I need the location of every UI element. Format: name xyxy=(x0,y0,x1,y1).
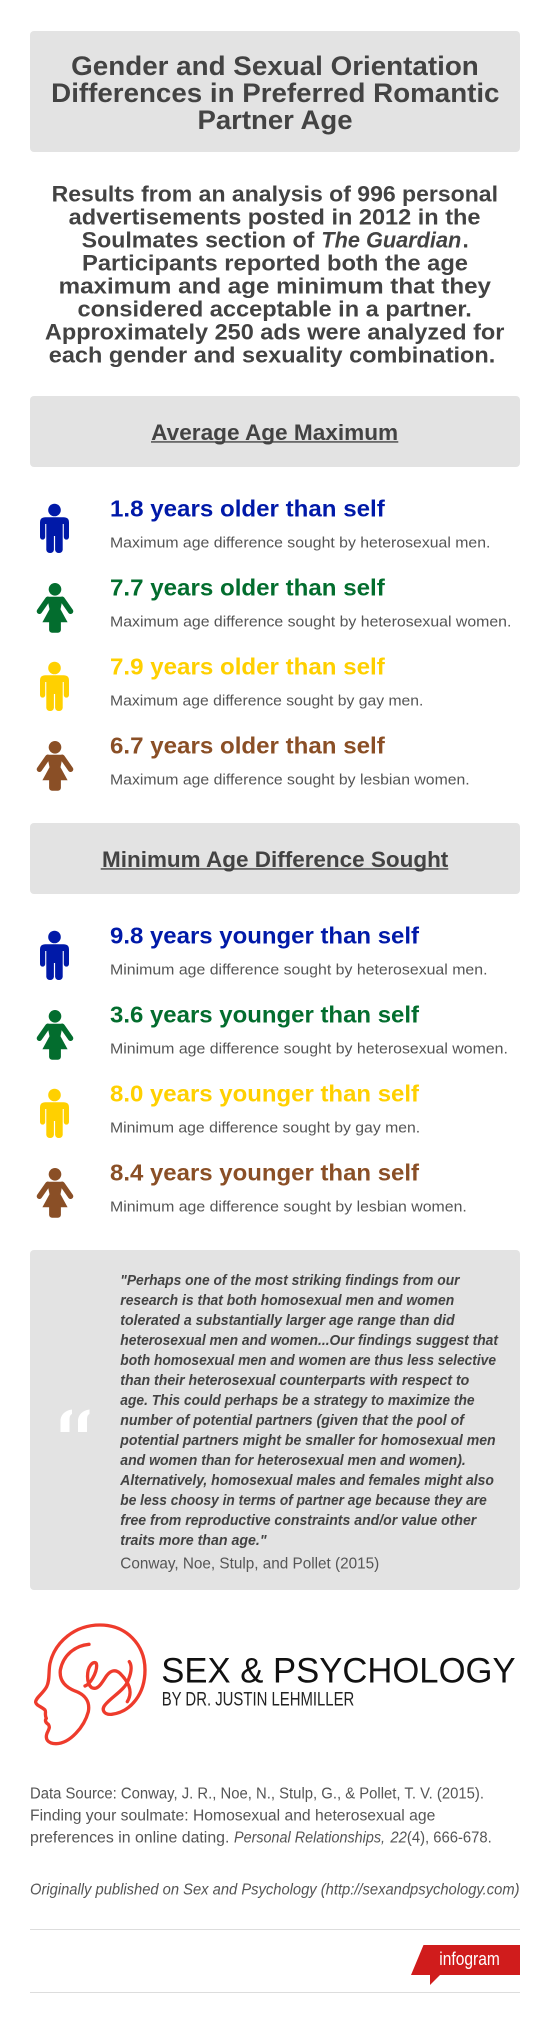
panel: minimum age difference heading: Minimum Age Difference Sought xyxy=(102,847,449,872)
text block: introduction: Approximately 250 ads were analyzed for xyxy=(45,320,505,345)
heading: title xyxy=(51,51,499,135)
text block: quotation: number of potential partners (given that the pool of xyxy=(120,1413,466,1429)
row: heterosexual women maximum xyxy=(39,575,511,633)
text block: introduction: The Guardian xyxy=(321,228,461,253)
logo: Sex & Psychology: BY DR. JUSTIN LEHMILLER xyxy=(162,1690,354,1711)
row: lesbian women minimum: 8.4 years younger than self xyxy=(110,1160,419,1186)
panel: quote xyxy=(30,1250,520,1590)
text block: quotation: both homosexual men and women are thus less selective xyxy=(120,1353,496,1369)
row: heterosexual women maximum: 7.7 years older than self xyxy=(110,575,385,601)
row: heterosexual women maximum: Maximum age difference sought by heterosexual women. xyxy=(110,613,511,630)
panel: average age maximum heading: Average Age Maximum xyxy=(151,420,398,445)
text block: quotation: "Perhaps one of the most striking findings from our xyxy=(120,1273,461,1289)
text block: quotation: Alternatively, homosexual males and females might also xyxy=(119,1473,494,1489)
row: heterosexual women minimum: Minimum age difference sought by heterosexual women. xyxy=(110,1040,508,1057)
text block: introduction: advertisements posted in 2012 in the xyxy=(69,205,480,230)
text block: data source: (4), 666-678. xyxy=(407,1829,492,1846)
icon: head with script xyxy=(36,1625,145,1744)
icon: man xyxy=(40,504,69,553)
text block: quotation xyxy=(119,1273,499,1549)
row: lesbian women maximum xyxy=(39,733,470,791)
row: lesbian women maximum: Maximum age difference sought by lesbian women. xyxy=(110,771,470,788)
icon: man xyxy=(40,1089,69,1138)
logo: Sex & Psychology xyxy=(36,1625,516,1744)
text block: data source: Data Source: Conway, J. R., Noe, N., Stulp, G., & Pollet, T. V. (2015). xyxy=(30,1785,484,1802)
text block: quotation: be less choosy in terms of partner age because they are xyxy=(120,1493,487,1509)
text block: quotation: tolerated a substantially larger age range than did xyxy=(120,1313,456,1329)
text block: quotation: potential partners might be smaller for homosexual men xyxy=(119,1433,496,1449)
text block: publication note: Originally published on Sex and Psychology (http://sexandpsychology.com) xyxy=(30,1881,520,1898)
text block: data source: preferences in online dating. xyxy=(30,1829,229,1846)
icon: woman xyxy=(39,741,71,791)
text block: introduction: Results from an analysis of 996 personal xyxy=(52,182,498,207)
badge: infogram xyxy=(411,1945,520,1985)
heading: title: Gender and Sexual Orientation xyxy=(71,51,479,81)
logo: Sex & Psychology: SEX & PSYCHOLOGY xyxy=(161,1651,516,1690)
text block: data source xyxy=(30,1785,492,1846)
row: heterosexual women minimum xyxy=(39,1002,508,1060)
text block: attribution: Conway, Noe, Stulp, and Pollet (2015) xyxy=(120,1555,379,1572)
text block: quotation: than their heterosexual counterparts with respect to xyxy=(120,1373,469,1389)
text block: introduction xyxy=(45,182,505,368)
row: lesbian women minimum: Minimum age difference sought by lesbian women. xyxy=(110,1198,467,1215)
row: lesbian women maximum: 6.7 years older than self xyxy=(110,733,385,759)
row: heterosexual men minimum: Minimum age difference sought by heterosexual men. xyxy=(110,961,488,978)
text block: data source: Personal Relationships, xyxy=(234,1829,385,1846)
text block: introduction: Participants reported both the age xyxy=(82,251,468,276)
row: lesbian women minimum xyxy=(39,1160,467,1218)
row: gay men minimum: Minimum age difference sought by gay men. xyxy=(110,1119,420,1136)
row: heterosexual men maximum: 1.8 years older than self xyxy=(110,496,385,522)
badge: infogram: infogram xyxy=(439,1948,500,1969)
icon: woman xyxy=(39,583,71,633)
row: heterosexual men minimum xyxy=(40,923,488,980)
text block: introduction: Soulmates section of xyxy=(82,228,315,253)
row: heterosexual men minimum: 9.8 years younger than self xyxy=(110,923,419,949)
heading: title: Differences in Preferred Romantic xyxy=(51,78,499,108)
text block: quotation: free from reproductive constraints and/or value other xyxy=(120,1513,478,1529)
row: heterosexual men maximum: Maximum age difference sought by heterosexual men. xyxy=(110,534,490,551)
row: gay men maximum: Maximum age difference sought by gay men. xyxy=(110,692,423,709)
text block: introduction: considered acceptable in a partner. xyxy=(78,297,472,322)
text block: introduction: . xyxy=(462,228,469,253)
row: gay men minimum xyxy=(40,1081,420,1138)
row: gay men maximum xyxy=(40,654,423,711)
text block: introduction: each gender and sexuality combination. xyxy=(49,343,495,368)
text block: introduction: maximum and age minimum that they xyxy=(59,274,492,299)
heading: title: Partner Age xyxy=(198,105,352,135)
row: gay men maximum: 7.9 years older than self xyxy=(110,654,385,680)
row: gay men minimum: 8.0 years younger than self xyxy=(110,1081,419,1107)
row: heterosexual men maximum xyxy=(40,496,490,553)
text block: quotation: research is that both homosexual men and women xyxy=(120,1293,454,1309)
panel: title xyxy=(30,31,520,152)
text block: quotation: age. This could perhaps be a strategy to maximize the xyxy=(120,1393,475,1409)
text block: quotation: traits more than age." xyxy=(120,1533,268,1549)
icon: man xyxy=(40,931,69,980)
icon: man xyxy=(40,662,69,711)
panel: average age maximum heading xyxy=(30,396,520,467)
row: heterosexual women minimum: 3.6 years younger than self xyxy=(110,1002,419,1028)
icon: woman xyxy=(39,1168,71,1218)
text block: data source: 22 xyxy=(389,1829,407,1846)
text block: data source: Finding your soulmate: Homosexual and heterosexual age xyxy=(30,1807,435,1824)
text block: quotation: and women than for heterosexual men and women). xyxy=(120,1453,466,1469)
icon: quotation mark xyxy=(60,1410,90,1432)
panel: minimum age difference heading xyxy=(30,823,520,894)
icon: woman xyxy=(39,1010,71,1060)
text block: quotation: heterosexual men and women...Our findings suggest that xyxy=(120,1333,499,1349)
